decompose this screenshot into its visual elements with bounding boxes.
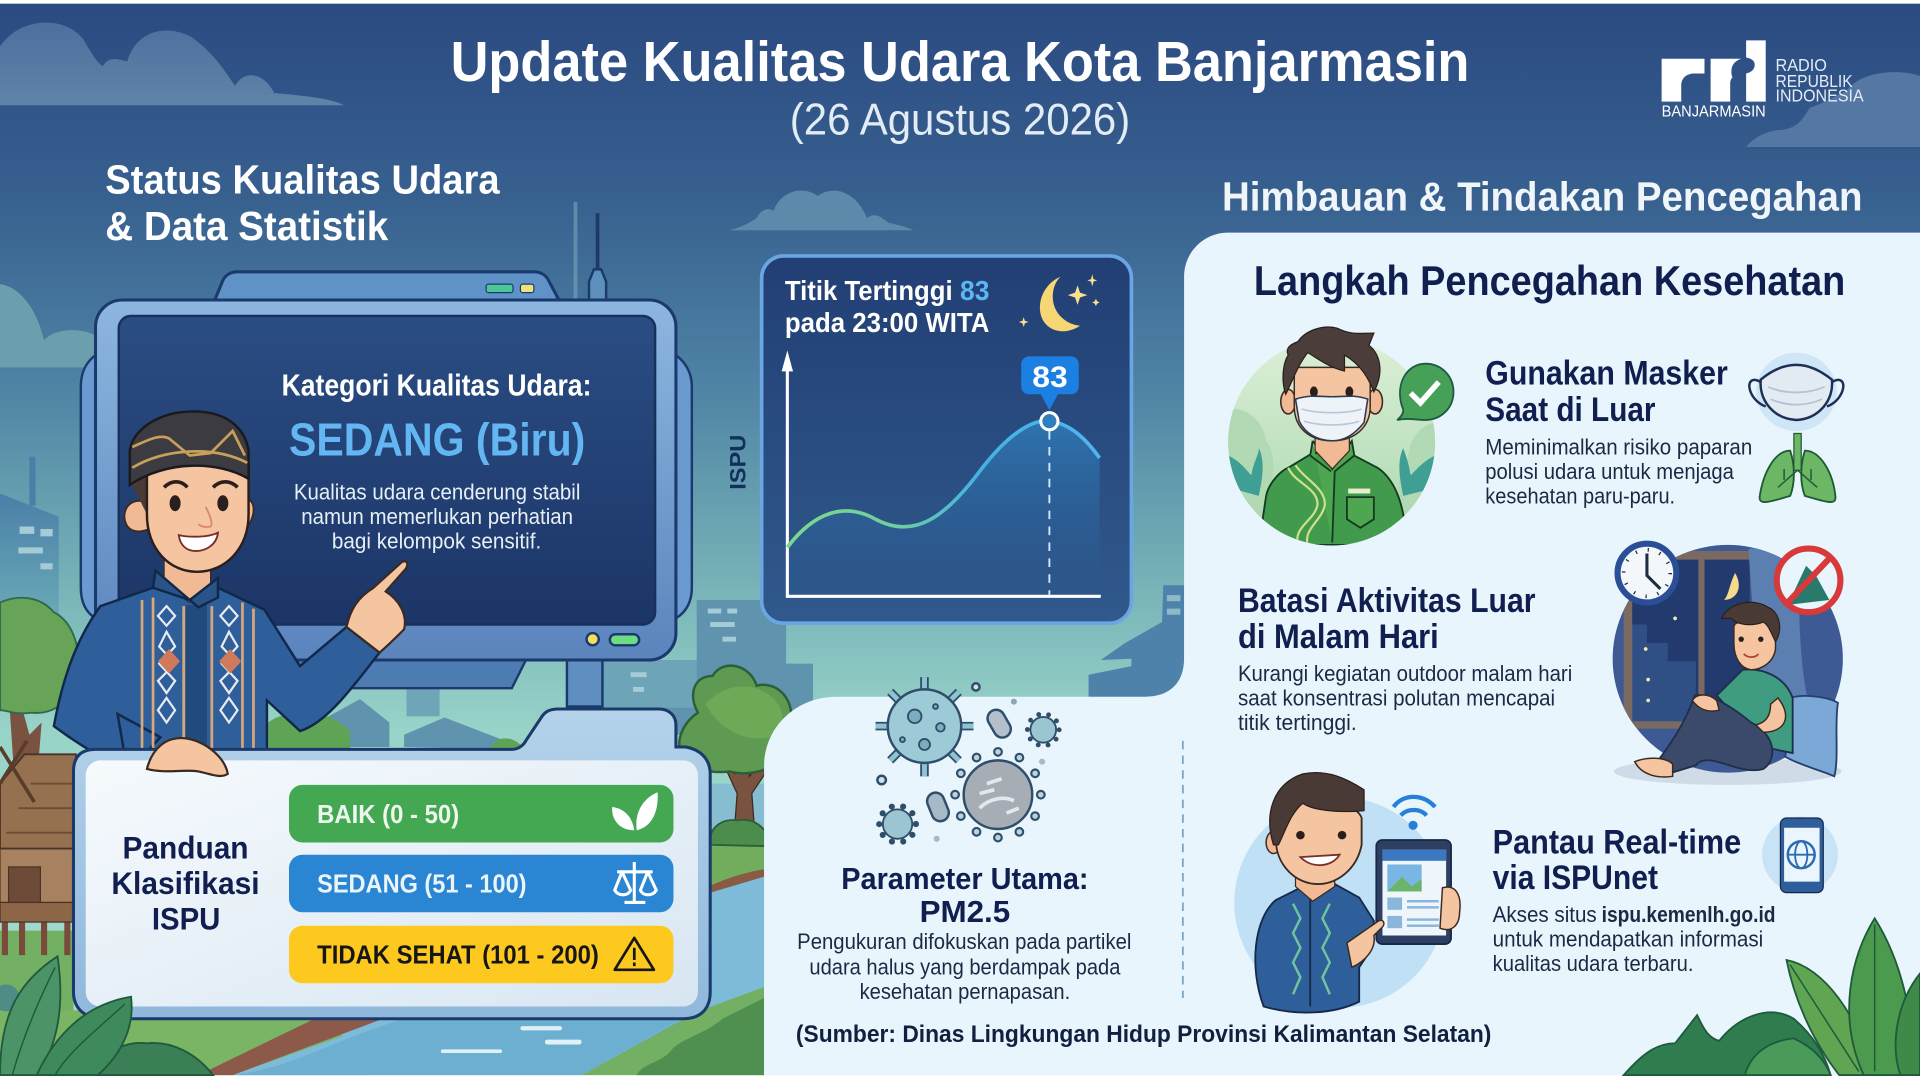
skyline right of chart <box>1089 585 1184 698</box>
tree right <box>679 666 797 846</box>
RRI logo: REPUBLIK <box>1776 71 1853 91</box>
pale houses under monitor <box>268 689 524 749</box>
chart title: 83 <box>960 275 989 306</box>
stilt house <box>0 741 76 1011</box>
neck <box>164 551 211 602</box>
panel: guide card <box>73 709 710 1019</box>
grey virus <box>955 752 1041 838</box>
heading: status <box>105 156 500 249</box>
icon: face mask <box>1749 353 1843 431</box>
tablet <box>1376 840 1451 944</box>
chart title <box>785 275 989 338</box>
ground and river <box>0 784 764 1075</box>
screen description: Kualitas udara cenderung stabil <box>294 480 580 505</box>
chart title: Titik Tertinggi <box>785 275 953 306</box>
text: parameter utama: udara halus yang berdampak pada <box>809 955 1121 980</box>
heading: status: Status Kualitas Udara <box>105 156 500 202</box>
capsules and dots <box>877 683 1045 842</box>
ears <box>124 499 254 531</box>
text: pantau <box>1493 823 1776 976</box>
cloud top right <box>1746 72 1920 147</box>
arm <box>1692 695 1786 732</box>
guide title: ISPU <box>152 900 220 936</box>
monitor frame <box>96 300 676 660</box>
heading: status: & Data Statistik <box>105 203 389 249</box>
plant bottom right <box>1624 918 1920 1075</box>
text: batasi: di Malam Hari <box>1238 618 1439 656</box>
text: pantau: Akses situs <box>1493 902 1597 927</box>
badge: sedang <box>289 855 673 912</box>
neck <box>1296 863 1335 901</box>
neck <box>1315 431 1349 469</box>
coat <box>54 588 380 770</box>
panel heading: langkah: Langkah Pencegahan Kesehatan <box>1254 257 1845 304</box>
heading: himbauan: Himbauan & Tindakan Pencegahan <box>1222 174 1862 220</box>
ears <box>1281 389 1296 414</box>
hair <box>1270 773 1364 845</box>
monitor screen <box>119 316 655 624</box>
screen label: Kategori Kualitas Udara: <box>282 369 591 403</box>
screen LEDs <box>587 633 639 645</box>
text: parameter utama <box>797 862 1131 1004</box>
body <box>1255 884 1374 1013</box>
brows <box>164 482 238 487</box>
chart axes <box>784 356 1101 596</box>
text: pantau: ispu.kemenlh.go.id <box>1602 902 1776 927</box>
eyes <box>1310 386 1353 397</box>
RRI logo: RADIO <box>1776 55 1827 75</box>
antenna <box>576 202 606 300</box>
mask <box>1296 396 1368 441</box>
monitor <box>81 272 692 707</box>
guide title: Klasifikasi <box>111 865 260 901</box>
text: batasi <box>1238 582 1572 735</box>
nose <box>198 507 212 527</box>
text: masker <box>1485 354 1752 508</box>
panel: right light background <box>764 233 1920 1075</box>
monitor lower bracket <box>208 659 527 688</box>
cloud top left <box>0 22 344 105</box>
illustration: man with mask <box>1224 327 1439 546</box>
chart peak marker <box>1041 413 1058 430</box>
text: pantau: Pantau Real-time <box>1493 823 1741 861</box>
coat batik stripes <box>142 598 253 749</box>
left hand <box>147 738 228 776</box>
badge: sedang: SEDANG (51 - 100) <box>317 871 527 899</box>
character: presenter body <box>54 551 380 770</box>
chart y-axis label: ISPU <box>726 435 751 490</box>
RRI logo <box>1662 40 1864 120</box>
chart tooltip: 83 <box>1032 361 1068 394</box>
coat orange diamonds <box>158 649 241 673</box>
screen description: bagi kelompok sensitif. <box>332 529 541 554</box>
mouth <box>179 533 218 551</box>
right hand <box>347 561 407 653</box>
shirt <box>1717 669 1793 753</box>
text: masker: polusi udara untuk menjaga <box>1485 459 1735 484</box>
plant bottom left <box>0 956 213 1075</box>
badge: baik <box>289 785 673 842</box>
face <box>1276 801 1362 884</box>
leg back <box>1659 695 1772 774</box>
foot <box>1635 758 1673 777</box>
hat pattern <box>132 431 247 468</box>
background shrubs <box>1224 409 1439 545</box>
monitor top housing <box>214 272 560 301</box>
icon: phone globe <box>1762 817 1838 893</box>
small virus left <box>879 806 916 842</box>
badge: tidak sehat <box>289 926 673 983</box>
card back with folder tab <box>73 709 710 1019</box>
coat batik diamonds <box>158 606 238 722</box>
icon: check bubble <box>1397 364 1453 420</box>
guide title: Panduan <box>122 829 249 865</box>
text: batasi: saat konsentrasi polutan mencapai <box>1238 685 1555 710</box>
chart title: pada 23:00 WITA <box>785 307 989 338</box>
character: presenter head and hands <box>124 411 407 776</box>
chart area <box>787 421 1100 596</box>
icon: wifi <box>1393 797 1435 828</box>
hair <box>1283 327 1380 394</box>
monitor status LEDs <box>486 284 534 293</box>
head <box>1734 620 1776 670</box>
text: masker: Saat di Luar <box>1485 391 1656 429</box>
monitor side handles <box>81 355 692 618</box>
skyline left <box>0 457 59 637</box>
source note: (Sumber: Dinas Lingkungan Hidup Provinsi Kalimantan Selatan) <box>796 1021 1491 1048</box>
text: pantau: kualitas udara terbaru. <box>1493 951 1693 976</box>
screen description: namun memerlukan perhatian <box>301 504 573 529</box>
text: batasi: Batasi Aktivitas Luar <box>1238 582 1536 620</box>
batik pattern <box>1293 894 1330 1007</box>
title: Update Kualitas Udara Kota Banjarmasin <box>451 30 1469 93</box>
text: pantau: untuk mendapatkan informasi <box>1493 927 1763 952</box>
text: masker: Meminimalkan risiko paparan <box>1485 434 1752 459</box>
text: parameter utama: Parameter Utama: <box>841 862 1089 896</box>
text: parameter utama: kesehatan pernapasan. <box>860 979 1070 1004</box>
eyes <box>170 495 181 511</box>
holding hand <box>1440 887 1460 930</box>
illustration: virus particles <box>876 677 1059 842</box>
date subtitle: (26 Agustus 2026) <box>790 96 1130 145</box>
coat placket <box>186 605 207 749</box>
skyline right of monitor <box>604 600 813 735</box>
badge: baik: BAIK (0 - 50) <box>317 801 459 829</box>
ear <box>1266 831 1281 853</box>
dashed separator <box>1182 741 1184 998</box>
face <box>147 465 249 572</box>
icon: clock <box>1618 544 1676 602</box>
text: masker: kesehatan paru-paru. <box>1485 483 1675 508</box>
text: batasi: Kurangi kegiatan outdoor malam hari <box>1238 661 1572 686</box>
text: parameter utama: Pengukuran difokuskan pada partikel <box>797 929 1131 954</box>
chart tooltip <box>1021 356 1079 410</box>
RRI logo: BANJARMASIN <box>1662 103 1766 120</box>
text: masker: Gunakan Masker <box>1485 354 1728 392</box>
RRI logo: INDONESIA <box>1776 86 1864 106</box>
hat peci <box>130 411 249 485</box>
text: batasi: titik tertinggi. <box>1238 710 1357 735</box>
icon: no outdoors <box>1776 547 1842 613</box>
badge: tidak sehat: TIDAK SEHAT (101 - 200) <box>317 942 599 970</box>
small virus right <box>1027 714 1059 746</box>
chart curve <box>787 421 1100 547</box>
screen description <box>294 480 580 554</box>
hair <box>130 470 157 514</box>
screen category: SEDANG (Biru) <box>289 414 585 466</box>
icon: lungs <box>1760 433 1836 502</box>
pillow <box>1785 696 1838 776</box>
pointing hand <box>1347 920 1384 967</box>
monitor stand <box>567 659 602 707</box>
guide title <box>111 829 260 936</box>
ground left <box>0 931 73 1075</box>
text: parameter utama: PM2.5 <box>920 895 1010 929</box>
green jacket <box>1259 453 1408 545</box>
face <box>1294 367 1370 441</box>
illustration: man with tablet <box>1234 773 1460 1013</box>
tree left <box>0 598 79 784</box>
cloud left middle <box>0 284 96 367</box>
chart peak dashed line <box>1048 431 1050 595</box>
collar <box>153 571 218 607</box>
card inner <box>86 760 698 1007</box>
cloud middle <box>729 190 913 230</box>
icon: moon and stars <box>1019 274 1100 331</box>
text: pantau: via ISPUnet <box>1493 859 1658 897</box>
illustration: man sitting at night <box>1613 545 1843 785</box>
panel: chart <box>762 256 1131 623</box>
large teal virus <box>876 677 973 776</box>
